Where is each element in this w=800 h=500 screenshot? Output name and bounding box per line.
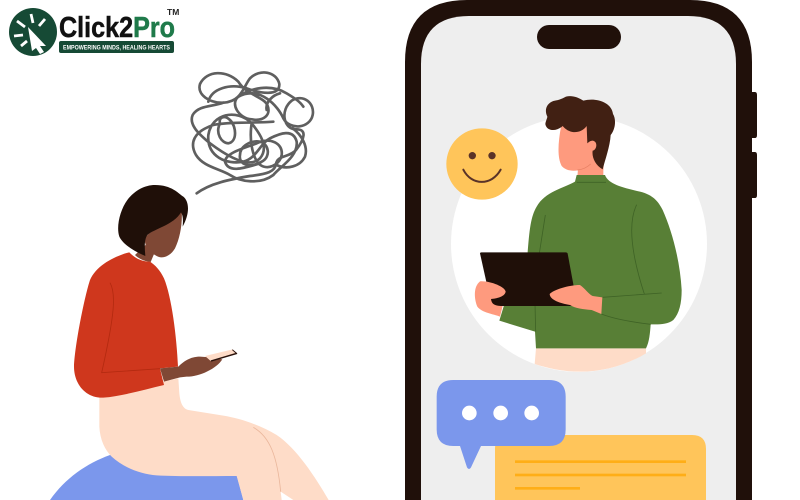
head bbox=[559, 117, 607, 171]
green sweater body bbox=[499, 175, 682, 348]
logo wordmark: Click2Pro bbox=[59, 12, 175, 44]
red sweater bbox=[74, 252, 178, 398]
illustration: phone device bbox=[405, 0, 757, 500]
icon: tangled thought scribble bbox=[192, 72, 313, 193]
knee crease bbox=[253, 427, 281, 492]
right hand bbox=[550, 285, 602, 314]
chat panels bbox=[437, 380, 706, 500]
trademark: TM bbox=[167, 7, 179, 17]
jaw line bbox=[577, 164, 591, 170]
blue typing bubble bbox=[437, 380, 566, 469]
logo tagline: EMPOWERING MINDS, HEALING HEARTS bbox=[63, 46, 170, 52]
illustration: counsellor with tablet bbox=[446, 96, 682, 372]
illustration: woman sitting on ball with phone bbox=[50, 185, 329, 500]
hand bbox=[160, 357, 222, 382]
phone notch bbox=[537, 25, 621, 49]
smiley bbox=[446, 128, 518, 200]
left hand bbox=[475, 281, 506, 317]
exercise ball bbox=[50, 455, 243, 500]
logo: Click2Pro bbox=[9, 7, 179, 56]
phone screen bbox=[421, 16, 736, 500]
logo tagline bbox=[59, 41, 174, 53]
face bbox=[145, 210, 182, 257]
trousers bbox=[535, 348, 646, 372]
tablet bbox=[480, 252, 577, 306]
hair bbox=[545, 96, 615, 169]
avatar circle bbox=[451, 116, 707, 372]
neck bbox=[577, 162, 603, 177]
phone body bbox=[405, 0, 752, 500]
sweater folds bbox=[535, 182, 662, 332]
side buttons bbox=[750, 92, 757, 198]
hair bbox=[118, 185, 188, 256]
sweater folds bbox=[102, 283, 160, 373]
neck bbox=[135, 245, 155, 262]
logo icon: cursor with rays bbox=[9, 8, 57, 56]
trousers bbox=[99, 378, 329, 500]
yellow message card bbox=[495, 435, 706, 500]
phone bbox=[205, 349, 237, 362]
